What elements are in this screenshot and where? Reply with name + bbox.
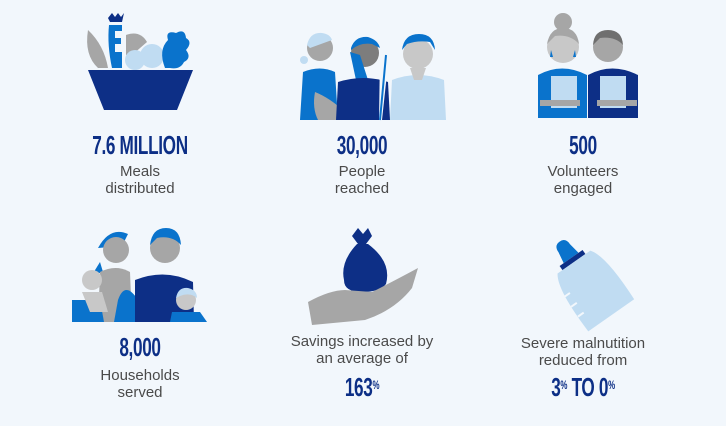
text: malnutrition — [521, 335, 645, 369]
text: households: Households — [100, 367, 180, 384]
stat: volunteers: 500 — [569, 130, 597, 160]
text: savings — [291, 333, 434, 367]
text: volunteers: Volunteers — [548, 163, 618, 180]
icon: baby bottle — [536, 225, 634, 332]
text: households: served — [117, 384, 163, 401]
text: meals: Meals — [120, 163, 160, 180]
stat: malnutrition: 3% TO 0% — [551, 372, 615, 402]
stat: meals: 7.6 MILLION — [92, 130, 188, 160]
icon: hand with money bag — [308, 228, 418, 325]
text: malnutrition: reduced from — [539, 352, 627, 369]
icon: people reached — [300, 33, 446, 120]
text: savings: Savings increased by — [291, 333, 433, 350]
text: people: People — [339, 163, 385, 180]
text: meals — [105, 163, 175, 197]
stat: households: 8,000 — [119, 332, 161, 362]
icon: household — [72, 228, 207, 322]
stat: people: 30,000 — [337, 130, 387, 160]
text: volunteers: engaged — [554, 180, 612, 197]
text: people — [335, 163, 389, 197]
text: malnutrition: Severe malnutition — [521, 335, 645, 352]
icon: salad bowl — [87, 13, 193, 110]
text: volunteers — [548, 163, 618, 197]
text: households — [100, 367, 180, 401]
text: people: reached — [335, 180, 389, 197]
stat: savings: 163% — [345, 372, 379, 402]
text: savings: an average of — [316, 350, 408, 367]
icon: volunteers — [538, 13, 638, 118]
text: meals: distributed — [105, 180, 175, 197]
